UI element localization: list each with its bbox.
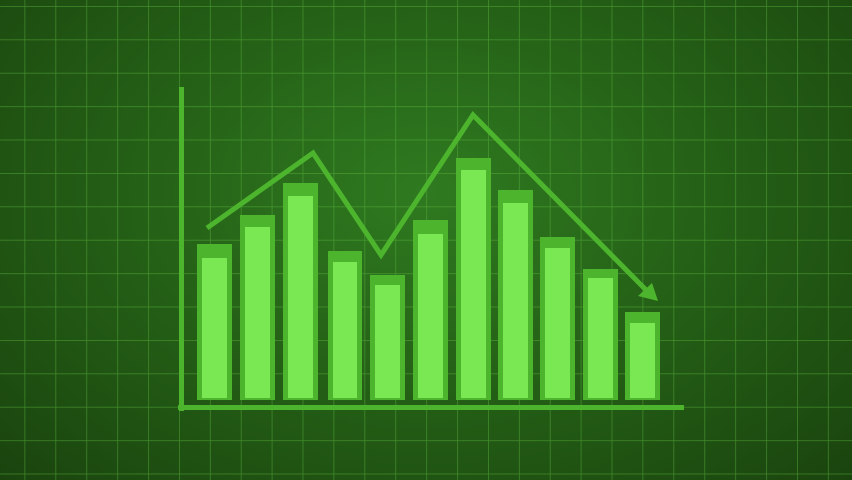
bars <box>197 158 660 400</box>
trend line with arrow <box>207 115 658 301</box>
axes <box>178 87 684 411</box>
